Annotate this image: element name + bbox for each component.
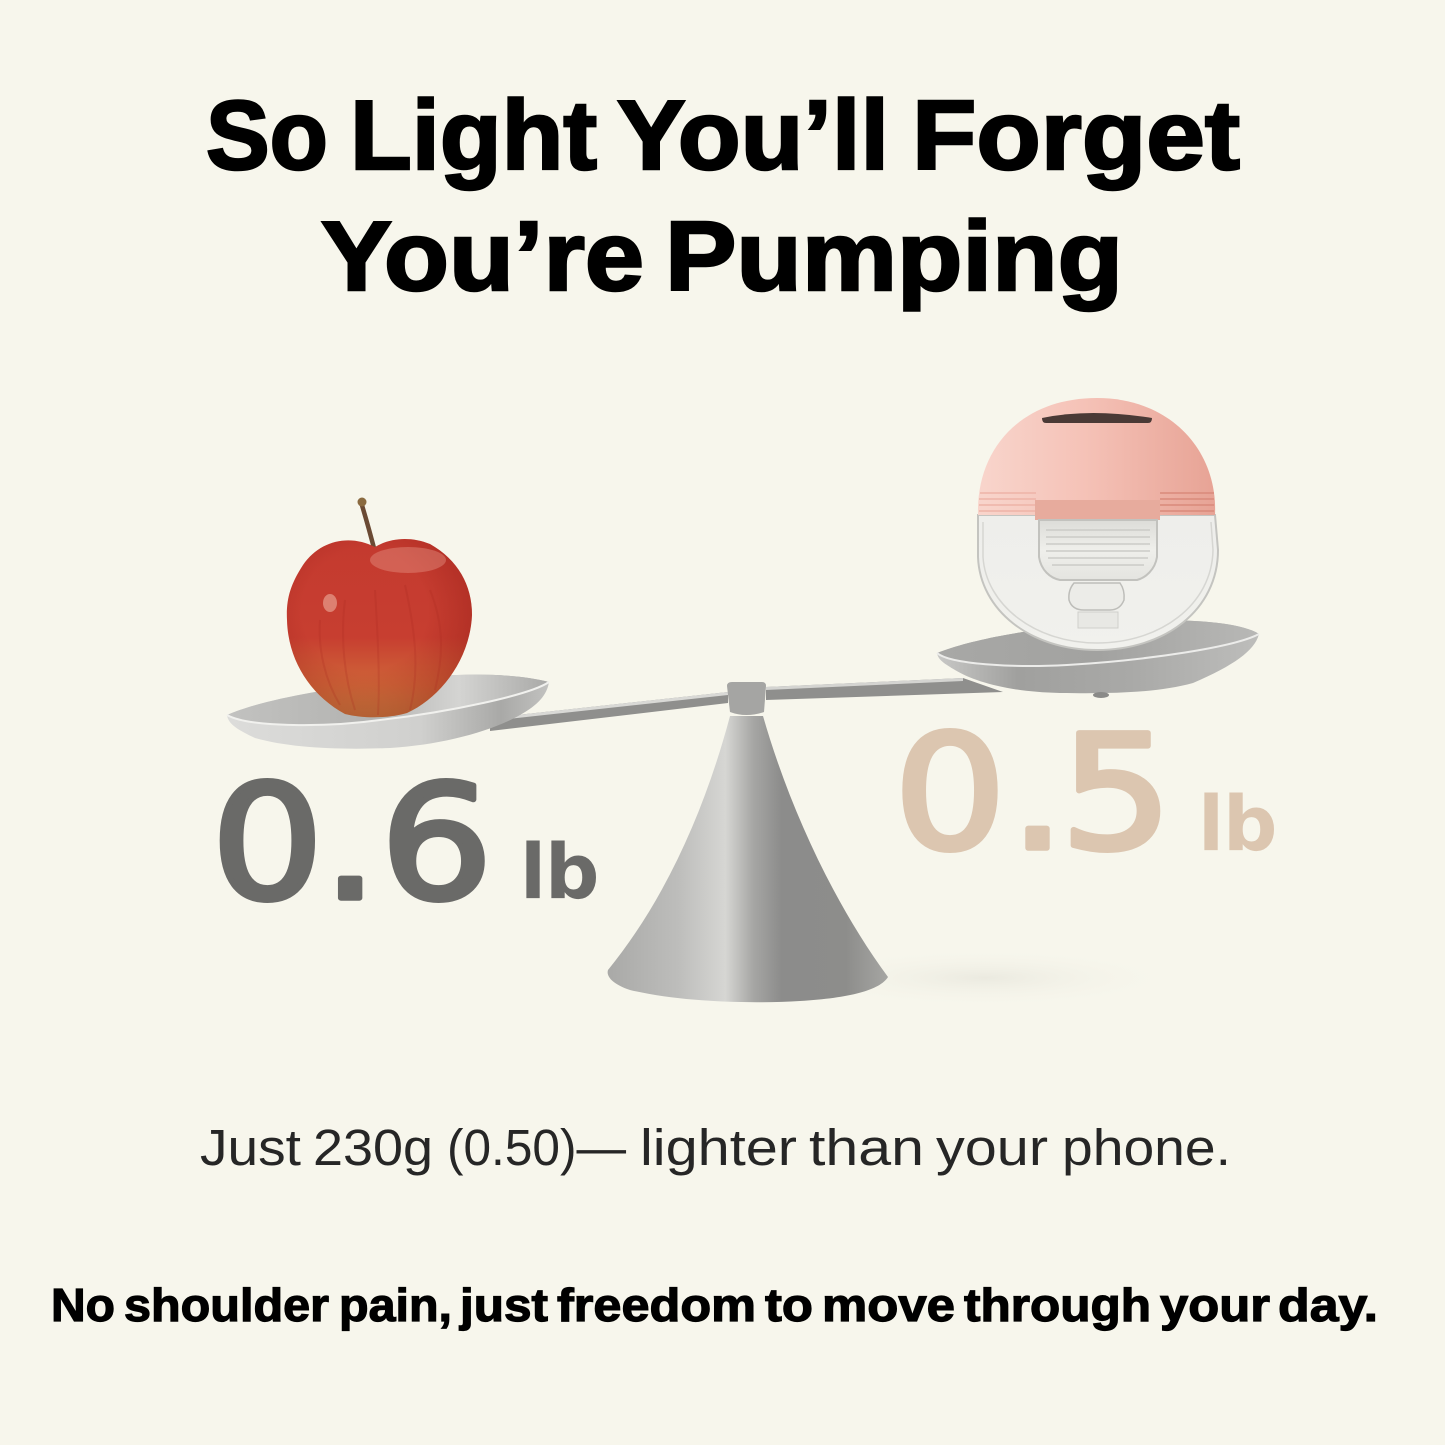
pump cup inner outline bbox=[983, 522, 1213, 643]
pump band left lines bbox=[979, 493, 1036, 511]
closing statement: your bbox=[1160, 1279, 1270, 1331]
pump valve bbox=[1069, 583, 1124, 610]
title: You’ll bbox=[617, 80, 889, 190]
right weight label: lb bbox=[1198, 779, 1277, 868]
pump valve stem bbox=[1078, 612, 1118, 628]
right weight label: 0.5 bbox=[894, 701, 1173, 886]
apple bbox=[287, 498, 472, 717]
pump slot bbox=[1042, 413, 1152, 423]
title: Light bbox=[350, 80, 597, 190]
balance scale illustration bbox=[227, 398, 1259, 1008]
subtitle: Just bbox=[200, 1119, 301, 1176]
closing statement: move bbox=[822, 1279, 955, 1331]
left plate bbox=[227, 675, 549, 749]
title: So bbox=[206, 80, 328, 190]
subtitle: lighter bbox=[640, 1119, 797, 1176]
title: Pumping bbox=[665, 201, 1123, 311]
closing statement: shoulder bbox=[124, 1279, 329, 1331]
pump band notch bbox=[1035, 500, 1160, 520]
title: Forget bbox=[912, 80, 1240, 190]
subtitle: phone. bbox=[1062, 1119, 1231, 1176]
floor shadow bbox=[790, 948, 1180, 1008]
left weight label: 0.6 bbox=[211, 751, 493, 936]
subtitle: (0.50)— bbox=[447, 1119, 626, 1176]
title bbox=[206, 80, 1240, 311]
pump pink dome bbox=[978, 398, 1215, 515]
closing statement: to bbox=[765, 1279, 813, 1331]
subtitle: your bbox=[936, 1119, 1048, 1176]
apple highlight bbox=[370, 547, 446, 573]
title: You’re bbox=[321, 201, 644, 311]
scale pivot bbox=[727, 682, 766, 715]
right plate bbox=[937, 620, 1259, 698]
closing statement: through bbox=[964, 1279, 1151, 1331]
pump clear cup bbox=[978, 515, 1218, 650]
subtitle: 230g bbox=[313, 1119, 433, 1176]
scale beam bbox=[490, 678, 1003, 731]
closing statement: just bbox=[459, 1279, 548, 1331]
closing statement: pain, bbox=[339, 1279, 452, 1331]
closing statement: freedom bbox=[557, 1279, 756, 1331]
closing statement: No bbox=[51, 1279, 115, 1331]
apple shine spot bbox=[323, 594, 337, 612]
subtitle: than bbox=[809, 1119, 924, 1176]
pump band right lines bbox=[1160, 493, 1214, 511]
pump inner flange bbox=[1039, 520, 1157, 580]
closing statement: day. bbox=[1278, 1279, 1378, 1331]
scale cone stand bbox=[608, 716, 888, 1002]
pump device bbox=[978, 398, 1218, 650]
left weight label: lb bbox=[520, 827, 599, 916]
